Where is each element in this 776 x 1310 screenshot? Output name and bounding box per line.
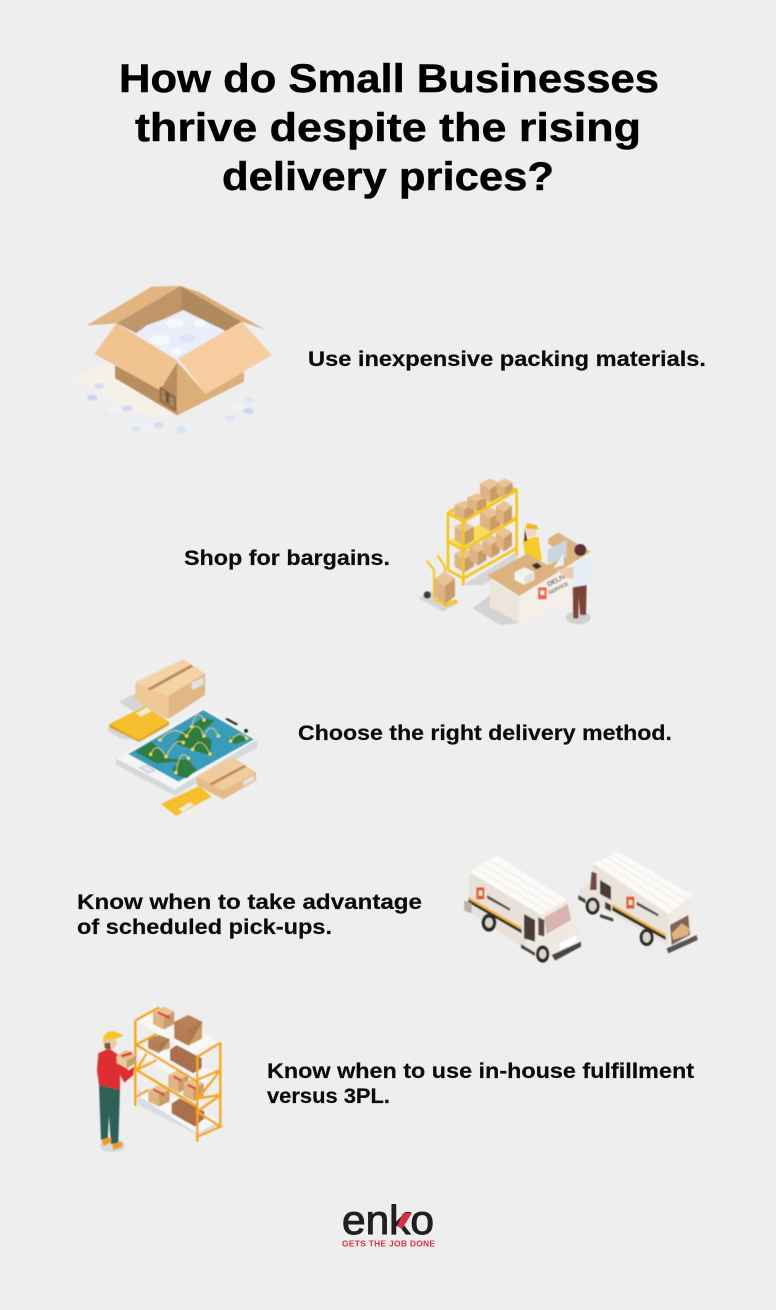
text: in-house fulfillment (267, 1060, 694, 1108)
title: How do Small Businesses (119, 57, 659, 101)
text: scheduled pick-ups (77, 891, 422, 939)
icon: delivery service counter with shelves: SERVICE (548, 581, 570, 596)
icon: phone with world map and parcels (107, 659, 257, 816)
icon: delivery service counter with shelves: DELIVE (546, 571, 571, 588)
icon: two delivery vans (464, 852, 698, 963)
title: delivery prices? (222, 155, 554, 199)
icon: open cardboard box with packing peanuts (73, 286, 272, 434)
logo accent (397, 1213, 412, 1229)
text: in-house fulfillment: versus 3PL. (267, 1085, 390, 1108)
van 2 (578, 852, 698, 953)
text: scheduled pick-ups: of scheduled pick-ups. (77, 916, 332, 939)
text: scheduled pick-ups: Know when to take advantage (77, 891, 422, 914)
icon: delivery service counter with shelves (418, 478, 591, 625)
logo: enko: enko (342, 1197, 434, 1243)
title (119, 57, 659, 199)
text: bargains: Shop for bargains. (184, 547, 390, 570)
text: packing materials: Use inexpensive packing materials. (308, 348, 706, 371)
text: delivery method: Choose the right delivery method. (298, 722, 672, 745)
text: in-house fulfillment: Know when to use in-house fulfillment (267, 1060, 694, 1083)
van 1 (464, 855, 581, 963)
icon: warehouse worker at shelves (97, 1007, 220, 1152)
logo tagline: GETS THE JOB DONE (342, 1238, 435, 1248)
title: thrive despite the rising (135, 106, 641, 150)
